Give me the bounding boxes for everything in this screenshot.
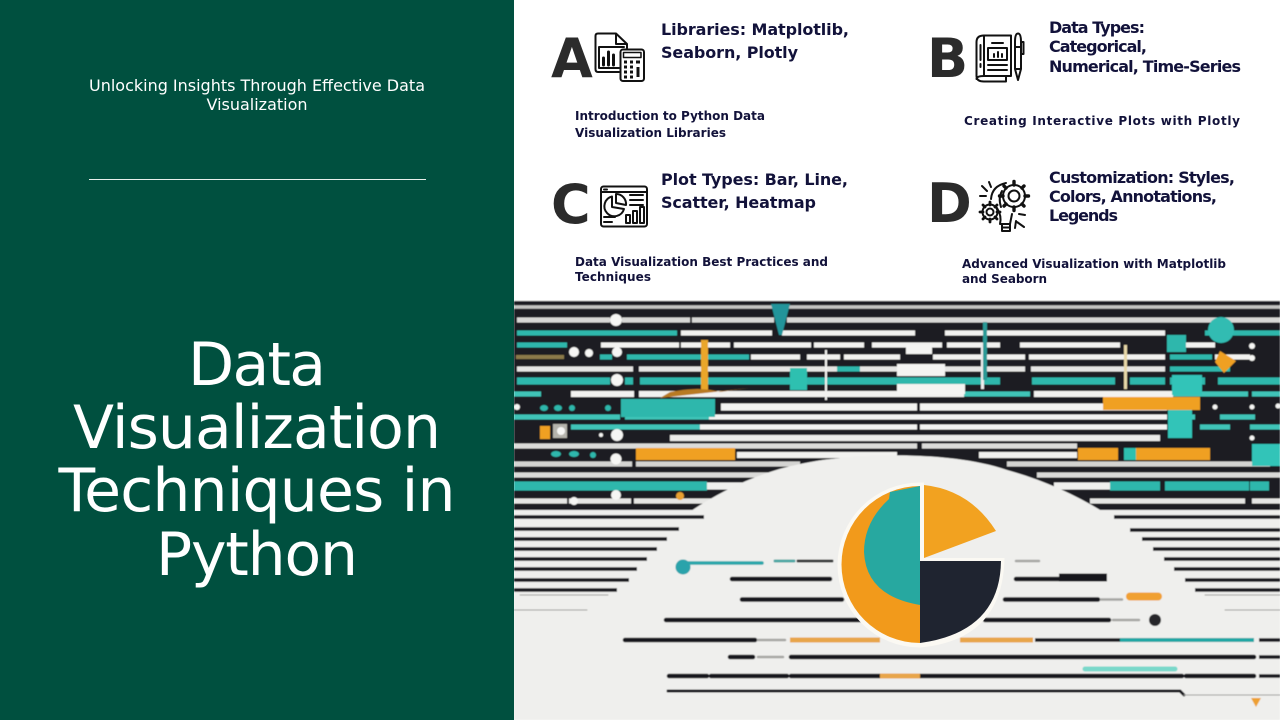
heading C — [661, 170, 848, 212]
heading D: Legends — [1049, 206, 1118, 225]
item B: data types: B — [927, 27, 968, 90]
heading A — [661, 20, 849, 62]
panel: left title panel — [0, 0, 514, 720]
item D: customization: D — [927, 172, 972, 235]
subtitle — [89, 76, 425, 114]
heading B — [1049, 18, 1241, 76]
pie chart — [838, 482, 1004, 648]
heading C: Scatter, Heatmap — [661, 193, 816, 212]
item D: customization — [927, 168, 1235, 286]
colour blocks — [540, 304, 1280, 466]
heading A: Seaborn, Plotly — [661, 43, 799, 62]
heading B: Data Types: — [1049, 18, 1145, 37]
caption A: Visualization Libraries — [575, 126, 726, 140]
item A: libraries — [551, 20, 849, 140]
heading D: Customization: Styles, — [1049, 168, 1235, 187]
subtitle: Unlocking Insights Through Effective Data — [89, 76, 425, 95]
caption A — [575, 109, 765, 140]
heading D: Colors, Annotations, — [1049, 187, 1217, 206]
item B: data types — [927, 18, 1241, 128]
icon: book and pen — [976, 34, 1024, 82]
heading B: Categorical, — [1049, 37, 1147, 56]
panel: topics grid — [514, 0, 1280, 300]
heading B: Numerical, Time-Series — [1049, 57, 1241, 76]
heading D — [1049, 168, 1235, 225]
black and colour bars — [514, 517, 1280, 695]
item C: plot types: C — [551, 173, 591, 236]
item C: plot types — [551, 170, 848, 284]
item A: libraries: A — [551, 27, 593, 90]
title: Visualization — [73, 393, 441, 463]
title: Techniques in — [58, 456, 456, 526]
caption D: and Seaborn — [962, 272, 1047, 286]
title — [58, 330, 456, 590]
heading A: Libraries: Matplotlib, — [661, 20, 849, 39]
title: Data — [188, 330, 326, 400]
caption C: Data Visualization Best Practices and — [575, 255, 828, 269]
icon: document and calculator — [596, 34, 644, 81]
data points — [514, 314, 1280, 505]
illustration: abstract data chart — [514, 300, 1280, 720]
caption D — [962, 257, 1226, 286]
caption B: Creating Interactive Plots with Plotly — [964, 114, 1240, 128]
heading C: Plot Types: Bar, Line, — [661, 170, 848, 189]
caption C — [575, 255, 828, 284]
subtitle: Visualization — [206, 95, 308, 114]
dome background — [692, 454, 1100, 511]
title: Python — [156, 520, 358, 590]
caption A: Introduction to Python Data — [575, 109, 765, 123]
icon: light bulb with gears — [980, 182, 1028, 231]
caption C: Techniques — [575, 270, 651, 284]
caption D: Advanced Visualization with Matplotlib — [962, 257, 1226, 271]
icon: dashboard window — [601, 186, 647, 226]
